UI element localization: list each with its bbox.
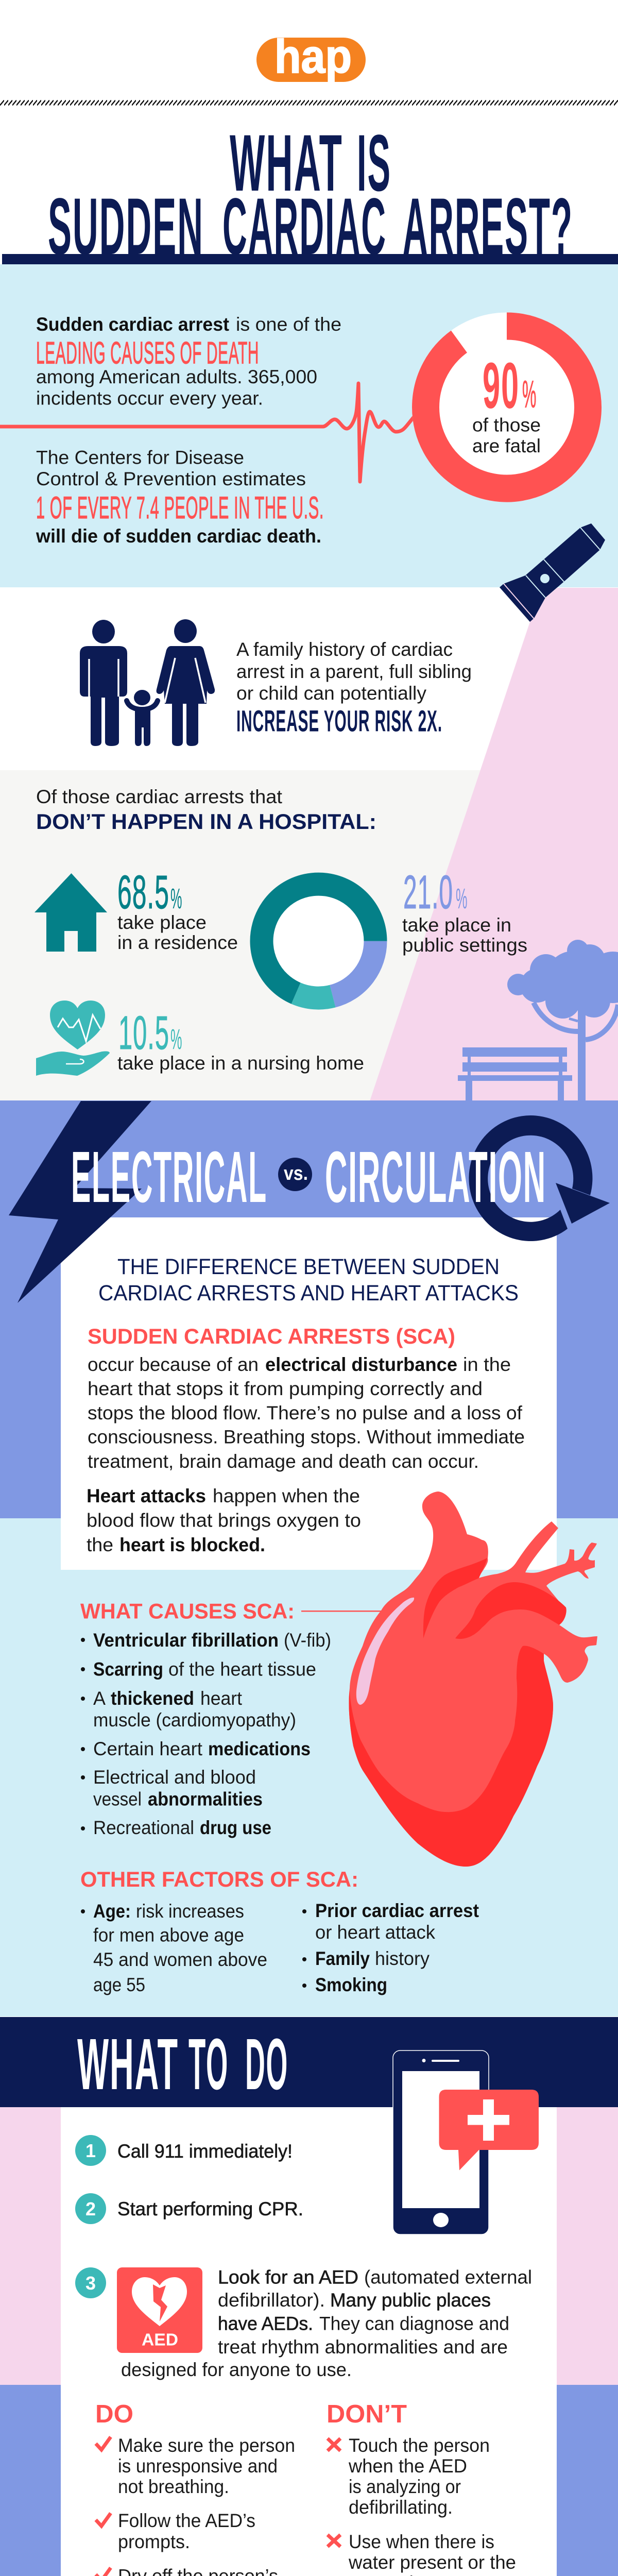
light beam — [370, 588, 618, 1101]
stat: public settings: % — [456, 882, 468, 914]
list: do: is unresponsive and — [118, 2455, 278, 2477]
stat: nursing home: 10.5 — [118, 1007, 169, 1059]
icon: heart — [349, 1492, 597, 1867]
text block: CDC estimate — [36, 447, 324, 547]
step 3: 3 — [85, 2273, 96, 2294]
stat: nursing home: % — [170, 1023, 182, 1055]
stat: residence: 68.5 — [117, 866, 169, 919]
pulse line — [0, 383, 414, 482]
text block: family history: A family history of cardiac — [236, 639, 453, 660]
stat: nursing home — [117, 1007, 364, 1074]
icon: AED: AED — [142, 2330, 178, 2349]
icon: x marks — [328, 2438, 340, 2576]
title — [2, 118, 618, 272]
step 2 — [75, 2193, 303, 2224]
step 1: Call 911 immediately! — [117, 2141, 293, 2162]
title: WHAT — [230, 118, 343, 208]
panel: grey stats background — [0, 770, 618, 1101]
icon: tree — [507, 940, 618, 1103]
donut chart: 90 percent: 90 — [483, 349, 520, 422]
text block: heart attacks: heart is blocked. — [119, 1534, 265, 1555]
stat: residence: in a residence — [117, 932, 238, 953]
list: what causes SCA: Certain heart — [93, 1738, 203, 1759]
list: what causes SCA: drug use — [200, 1817, 271, 1838]
text block: leading causes: is one of the — [236, 314, 341, 335]
list: what causes SCA: medications — [208, 1738, 311, 1759]
list: what causes SCA: Ventricular fibrillation — [93, 1630, 279, 1651]
donut chart: 90 percent: % — [522, 373, 537, 415]
title: CARDIAC — [222, 182, 387, 272]
list: do: DO — [95, 2400, 133, 2428]
list: don't: defibrillating. — [349, 2497, 453, 2518]
text block: look for an AED: treat rhythm abnormalities and are — [218, 2336, 508, 2358]
heading: electrical vs circulation: vs. — [284, 1163, 308, 1184]
heading: outside hospital — [36, 786, 376, 834]
list: don't — [327, 2400, 527, 2576]
icon: phone with medical bubble — [393, 2050, 539, 2234]
text block: leading causes — [36, 314, 341, 409]
text block: leading causes: incidents occur every year. — [36, 387, 263, 409]
stat: residence: take place — [117, 912, 207, 933]
text block: leading causes: LEADING CAUSES OF DEATH — [36, 336, 259, 370]
list: other factors of SCA: risk increases — [136, 1901, 244, 1922]
text block: look for an AED: defibrillator). — [218, 2290, 325, 2311]
step 1 — [75, 2135, 293, 2166]
list: don't: when the AED — [348, 2455, 467, 2477]
step 2: 2 — [85, 2198, 96, 2219]
text block: CDC estimate: The Centers for Disease — [36, 447, 244, 468]
list: other factors of SCA: Age: — [93, 1901, 131, 1922]
list: other factors of SCA: history — [375, 1948, 430, 1969]
text block: heart attacks: the — [87, 1534, 113, 1555]
text block: look for an AED — [121, 2267, 532, 2380]
list: other factors of SCA: Prior cardiac arrest — [315, 1900, 479, 1921]
step 1: 1 — [85, 2140, 96, 2161]
text block: look for an AED: designed for anyone to use. — [121, 2359, 352, 2380]
stat: public settings — [402, 866, 527, 956]
text block: CDC estimate: 1 OF EVERY 7.4 PEOPLE IN THE U.S. — [36, 490, 324, 525]
stat: residence — [117, 866, 238, 953]
subheading: difference: CARDIAC ARRESTS AND HEART ATTACKS — [98, 1281, 519, 1306]
text block: sudden cardiac arrests: treatment, brain damage and death can occur. — [88, 1451, 479, 1472]
text block: heart attacks: happen when the — [213, 1485, 360, 1506]
list: what causes SCA — [80, 1599, 382, 1838]
list: what causes SCA: abnormalities — [148, 1789, 263, 1809]
panel: electrical vs circulation background — [0, 1100, 618, 1518]
list: what causes SCA: of the heart tissue — [168, 1659, 316, 1680]
text block: look for an AED: Many public places — [330, 2290, 491, 2311]
text block: leading causes: among American adults. 365,000 — [36, 366, 317, 387]
list: do: Make sure the person — [118, 2435, 295, 2456]
text block: heart attacks: blood flow that brings oxygen to — [87, 1510, 361, 1531]
donut chart: 90 percent: are fatal — [472, 435, 541, 456]
subheading: difference: THE DIFFERENCE BETWEEN SUDDEN — [117, 1255, 500, 1279]
list: don't: Touch the person — [349, 2435, 490, 2456]
donut chart: 90 percent — [412, 312, 602, 502]
heading: outside hospital: Of those cardiac arrests that — [36, 786, 283, 807]
step 3 — [75, 2267, 532, 2380]
list: what causes SCA: Scarring — [93, 1659, 163, 1680]
list: what causes SCA: A — [93, 1688, 106, 1709]
text block: family history — [236, 639, 472, 738]
list: other factors of SCA: Smoking — [315, 1974, 387, 1995]
icon: heart in hand — [36, 1001, 110, 1076]
list: other factors of SCA: age 55 — [93, 1974, 145, 1995]
stat: public settings: 21.0 — [403, 866, 453, 919]
text block: heart attacks — [87, 1485, 361, 1555]
list: what causes SCA: vessel — [93, 1789, 142, 1809]
list: do — [95, 2400, 295, 2576]
icon: house — [35, 873, 107, 952]
text block: sudden cardiac arrests: heart that stops it from pumping correctly and — [88, 1378, 483, 1399]
list: other factors of SCA: for men above age — [93, 1925, 244, 1945]
heading: what to do: WHAT — [77, 2023, 179, 2105]
icon: check marks — [96, 2437, 111, 2576]
list: don't: Use when there is — [349, 2531, 494, 2552]
list: do: not breathing. — [118, 2476, 229, 2497]
list: what causes SCA: (V-fib) — [284, 1630, 331, 1651]
text block: sudden cardiac arrests: electrical disturbance — [265, 1354, 457, 1375]
heading: outside hospital: DON’T HAPPEN IN A HOSPITAL: — [36, 809, 376, 834]
text block: sudden cardiac arrests — [88, 1324, 525, 1472]
text block: heart attacks: Heart attacks — [87, 1485, 206, 1506]
list: what causes SCA: heart — [200, 1688, 243, 1709]
list: other factors of SCA: 45 and women above — [93, 1949, 267, 1970]
icon: circular arrow — [469, 1115, 610, 1241]
stat: residence: % — [170, 882, 182, 914]
text block: CDC estimate: will die of sudden cardiac death. — [36, 526, 321, 547]
heading: electrical vs circulation: ELECTRICAL — [71, 1136, 267, 1217]
list: don't: DON’T — [327, 2400, 407, 2428]
text block: sudden cardiac arrests: consciousness. Breathing stops. Without immediate — [88, 1427, 525, 1448]
list: do: Follow the AED’s — [118, 2510, 255, 2531]
list: do: prompts. — [118, 2531, 190, 2552]
text block: sudden cardiac arrests: SUDDEN CARDIAC ARRESTS (SCA) — [88, 1324, 455, 1348]
title: IS — [357, 118, 391, 208]
text block: sudden cardiac arrests: occur because of an — [88, 1354, 259, 1375]
list: what causes SCA: muscle (cardiomyopathy) — [93, 1709, 296, 1731]
icon: lightning bolt — [9, 1101, 151, 1303]
text block: sudden cardiac arrests: in the — [463, 1354, 511, 1375]
text block: family history: arrest in a parent, full sibling — [236, 661, 472, 682]
icon: flashlight — [500, 523, 605, 622]
icon: AED — [117, 2267, 202, 2353]
title: SUDDEN — [48, 182, 204, 272]
stat: public settings: public settings — [402, 935, 527, 956]
donut chart: locations — [262, 884, 375, 998]
list: what causes SCA: Electrical and blood — [93, 1767, 256, 1788]
list: other factors of SCA: or heart attack — [315, 1922, 435, 1943]
panel: what to do background — [0, 2017, 618, 2576]
list: don't: water present or the — [348, 2552, 516, 2573]
text: DO — [245, 2023, 288, 2105]
step 2: Start performing CPR. — [117, 2198, 303, 2219]
subheading: difference — [98, 1255, 519, 1306]
text block: family history: or child can potentially — [236, 683, 426, 704]
icon: bench — [458, 1047, 572, 1103]
stat: nursing home: take place in a nursing home — [117, 1053, 364, 1074]
list: what causes SCA: Recreational — [93, 1817, 194, 1838]
text block: look for an AED: They can diagnose and — [319, 2313, 509, 2334]
list: don't: is analyzing or — [349, 2476, 461, 2497]
icon: family — [80, 619, 215, 746]
list: what causes SCA: thickened — [111, 1688, 194, 1709]
text block: sudden cardiac arrests: stops the blood flow. There’s no pulse and a loss of — [88, 1402, 523, 1423]
heading: what to do: TO — [188, 2023, 229, 2105]
list: other factors of SCA: OTHER FACTORS OF SCA: — [80, 1867, 358, 1891]
list: other factors of SCA: Family — [315, 1948, 370, 1969]
donut chart: 90 percent: of those — [472, 414, 541, 436]
text block: look for an AED: (automated external — [364, 2267, 532, 2288]
text block: look for an AED: Look for an AED — [218, 2267, 358, 2288]
text block: CDC estimate: Control & Prevention estimates — [36, 468, 306, 489]
logo: hap: hap — [274, 30, 352, 83]
stat: public settings: take place in — [402, 914, 511, 936]
text block: look for an AED: have AEDs. — [218, 2313, 313, 2334]
list: what causes SCA: WHAT CAUSES SCA: — [80, 1599, 295, 1623]
panel: intro statistics — [0, 264, 618, 587]
text block: leading causes: Sudden cardiac arrest — [36, 314, 229, 335]
list: other factors of SCA — [80, 1867, 479, 1995]
